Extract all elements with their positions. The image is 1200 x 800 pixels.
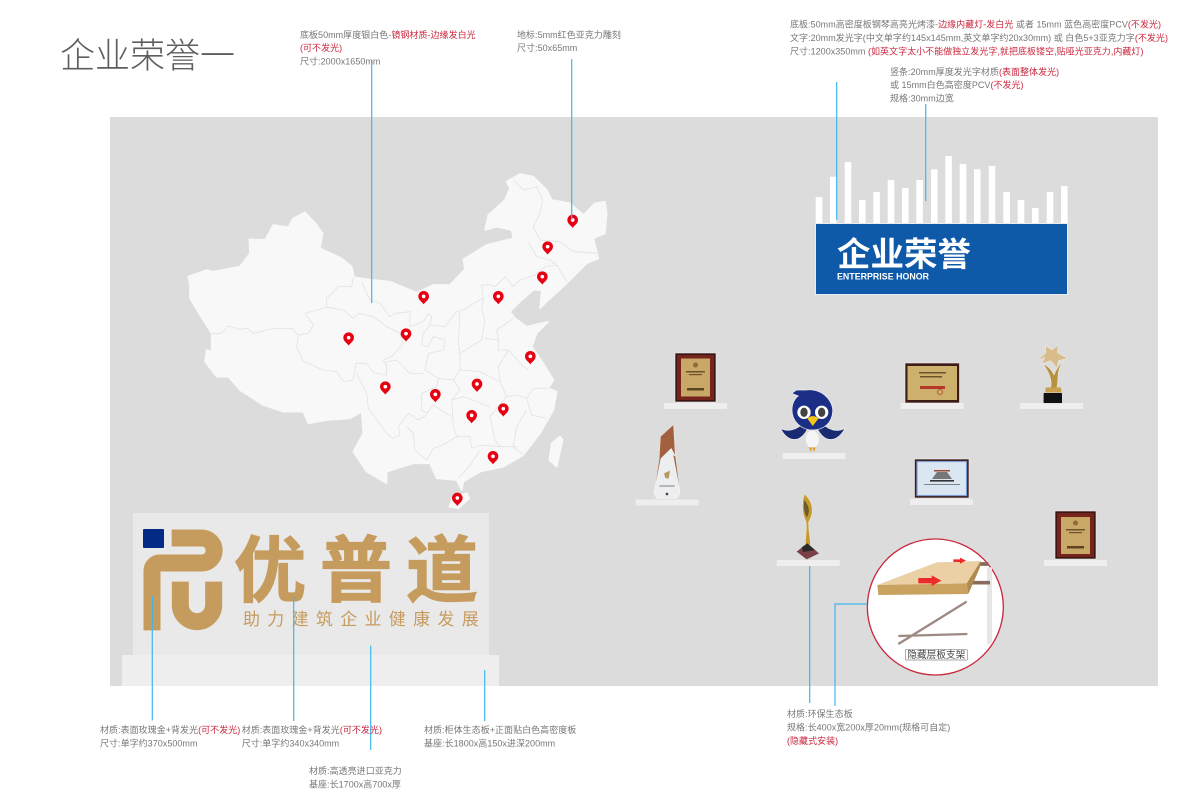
note: base plate: 底板50mm厚度银白色-镜钢材质-边缘发白光 xyxy=(300,29,476,40)
note: vertical bars: 规格:30mm边宽 xyxy=(890,92,954,104)
mascot: blue bird xyxy=(781,390,845,452)
callout: hidden shelf bracket detail: 隐藏层板支架 xyxy=(907,649,966,661)
bracket hardware xyxy=(898,602,967,644)
note: shelf: (隐藏式安装) xyxy=(787,735,838,746)
note: logo symbol: 尺寸:单字约370x500mm xyxy=(100,738,197,748)
red arrows xyxy=(918,575,941,586)
shelves xyxy=(636,403,1107,566)
note: base plate: 尺寸:2000x1650mm xyxy=(300,56,380,66)
map of China xyxy=(188,174,607,508)
note: company name: 尺寸:单字约340x340mm xyxy=(242,738,339,748)
company name: 优普道 xyxy=(234,512,492,617)
sign: vertical white bars xyxy=(816,156,1068,223)
logo: gold mark and wordmark xyxy=(143,512,492,630)
plaque: red wood award right xyxy=(1055,511,1096,559)
note: vertical bars: 或 15mm白色高密度PCV(不发光) xyxy=(890,79,1024,90)
callout lines xyxy=(152,59,926,750)
trophy: gold star xyxy=(1037,345,1068,403)
plaque: red wood award xyxy=(675,353,716,402)
icon: gold PU symbol xyxy=(152,538,214,630)
slogan: 助力建筑企业健康发展 xyxy=(243,605,486,630)
wall edge xyxy=(987,567,992,644)
note: shelf xyxy=(787,708,950,746)
note: acrylic panel xyxy=(309,765,402,790)
note: company name: 材质:表面玫瑰金+背发光(可不发光) xyxy=(242,724,382,735)
trophy: gold flame on crystal base xyxy=(797,494,819,559)
note: base plate: (可不发光) xyxy=(300,42,342,53)
note: cabinet base: 基座:长1800x高150x进深200mm xyxy=(424,738,555,748)
title: 企业荣誉一 xyxy=(60,28,235,79)
logo backing panel xyxy=(133,513,489,655)
note: acrylic panel: 材质:高透亮进口亚克力 xyxy=(309,765,402,776)
panel: grey wall xyxy=(110,117,1158,686)
note: shelf: 材质:环保生态板 xyxy=(787,708,853,719)
note: map marker: 尺寸:50x65mm xyxy=(517,42,577,53)
plaque: blue certificate xyxy=(914,459,969,498)
note: cabinet base: 材质:柜体生态板+正面贴白色高密度板 xyxy=(424,724,576,735)
note: vertical bars: 竖条:20mm厚度发光字材质(表面整体发光) xyxy=(890,66,1059,77)
sign subtitle: ENTERPRISE HONOR xyxy=(837,272,930,282)
trophy: copper and white crystal xyxy=(654,425,680,498)
note: map marker xyxy=(517,29,621,53)
note: company name xyxy=(242,724,382,748)
note: cabinet base xyxy=(424,724,576,748)
note: logo symbol xyxy=(100,724,240,748)
note: sign panel: 底板:50mm高密度板钢琴高亮光烤漆-边缘内藏灯-发白光 或者 15mm 蓝色高密度PCV(不发光) xyxy=(790,18,1161,30)
note: acrylic panel: 基座:长1700x高700x厚 xyxy=(309,778,401,790)
plaque: gold certificate xyxy=(905,363,960,403)
logo base xyxy=(122,655,499,686)
callout: hidden shelf bracket detail xyxy=(867,539,1003,675)
note: base plate xyxy=(300,29,476,66)
sign title: 企业荣誉 xyxy=(837,227,971,276)
note: sign panel: 文字:20mm发光字(中文单字约145x145mm,英文单字约20x30mm) 或 白色5+3亚克力字(不发光) xyxy=(790,32,1168,43)
note: vertical bars xyxy=(890,66,1059,104)
note: map marker: 地标:5mm红色亚克力雕刻 xyxy=(517,29,621,40)
wooden board xyxy=(877,561,981,585)
note: sign panel xyxy=(790,18,1168,56)
note: logo symbol: 材质:表面玫瑰金+背发光(可不发光) xyxy=(100,724,240,735)
hardware label xyxy=(905,649,967,660)
sign: blue panel xyxy=(816,224,1068,294)
note: sign panel: 尺寸:1200x350mm (如英文字太小不能做独立发光字,就把底板镂空,贴哑光亚克力,内藏灯) xyxy=(790,46,1143,56)
bracket rods xyxy=(970,564,990,583)
icon: blue square xyxy=(143,529,164,548)
note: shelf: 规格:长400x宽200x厚20mm(规格可自定) xyxy=(787,722,950,732)
icon: map pins xyxy=(343,215,578,506)
